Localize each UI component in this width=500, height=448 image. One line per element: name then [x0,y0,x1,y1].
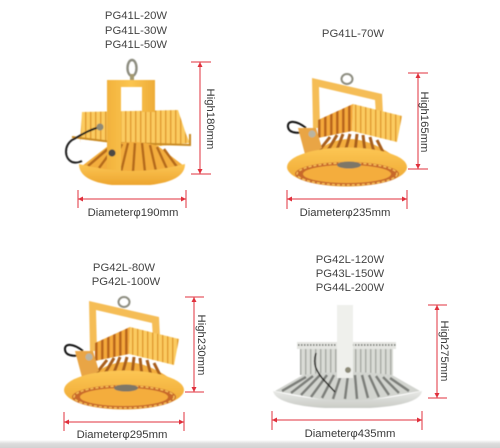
model labels: PG41L-30W [105,25,167,37]
model labels [316,254,385,294]
lamp photo: grey wide high bay [273,305,422,408]
height dimension arrow [185,297,204,392]
diameter dimension arrow [64,412,184,431]
lamp photo: tilted yellow high bay [287,74,407,186]
model labels: PG41L-20W [105,10,167,22]
model labels [92,262,161,288]
height label: High275mm [438,321,450,381]
model labels: PG44L-200W [316,282,385,294]
panel: PG41L 20W to 50W [66,10,216,219]
model labels: PG41L-50W [105,39,167,51]
diameter dimension arrow [287,190,407,209]
height dimension arrow [428,305,447,398]
lamp photo: small yellow high bay [66,60,190,185]
panel: PG41L 70W [287,28,430,219]
model labels: PG42L-80W [93,262,155,274]
height dimension arrow [191,62,211,174]
diameter label: Diameterφ190mm [88,207,178,219]
panel: PG42L 120W to PG44L 200W [272,254,450,440]
model labels: PG42L-100W [92,276,161,288]
model labels: PG42L-120W [316,254,385,266]
height label: High180mm [204,89,216,149]
diameter dimension arrow [272,411,422,430]
diameter dimension arrow [78,190,186,208]
panel: PG42L 80W to 100W [64,262,207,441]
height label: High165mm [418,92,430,152]
diameter label: Diameterφ295mm [77,429,167,441]
model labels: PG43L-150W [316,268,385,280]
bottom grey strip [0,440,500,448]
diameter label: Diameterφ235mm [300,207,390,219]
height label: High230mm [195,315,207,375]
diameter label: Diameterφ435mm [305,428,395,440]
model labels [105,10,167,51]
height dimension arrow [408,73,428,169]
lamp photo: tilted yellow high bay [64,297,184,410]
model label: PG41L-70W [322,28,384,40]
